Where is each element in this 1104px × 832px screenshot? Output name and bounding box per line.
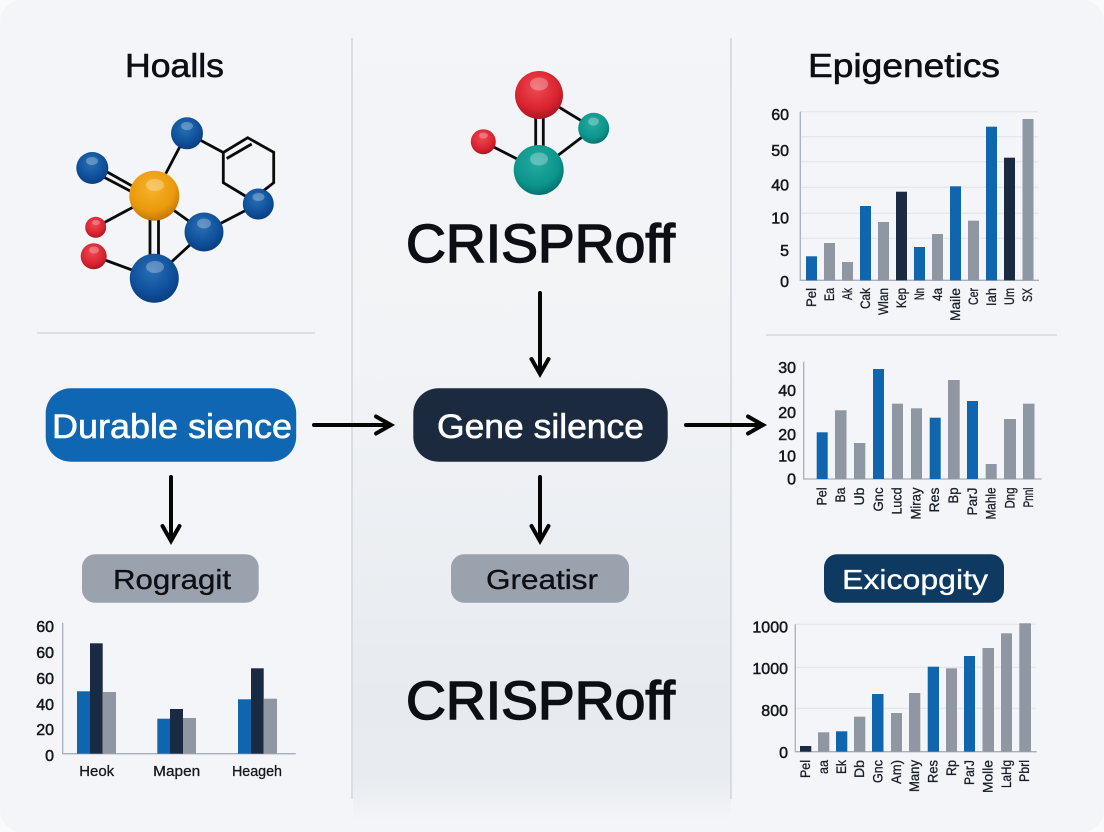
y axis labels: 0 <box>780 274 789 291</box>
x axis labels: Dng <box>1002 488 1018 508</box>
y axis labels: 0 <box>787 472 796 488</box>
arrow: down to Rogragit <box>162 477 180 541</box>
node: Greatisr <box>451 554 629 603</box>
x axis labels: Cer <box>965 288 981 305</box>
chart: bottom bar chart <box>752 620 1037 793</box>
x axis labels <box>797 759 1032 793</box>
node: Exicopgity: Exicopgity <box>842 564 988 595</box>
x axis labels: Ak <box>839 287 855 300</box>
y axis labels: 800 <box>761 703 788 720</box>
x axis labels: Heageh <box>232 763 282 780</box>
x axis labels: Cak <box>857 287 873 309</box>
arrow: left to center <box>314 416 391 434</box>
chart: middle bar chart <box>778 360 1042 520</box>
y axis labels: 40 <box>778 383 796 400</box>
node: Greatisr: Greatisr <box>486 564 598 595</box>
y axis labels: 20 <box>778 427 796 444</box>
heading: CRISPRoff top: CRISPRoff <box>406 214 676 274</box>
icon: molecule with gold center <box>76 117 274 303</box>
x axis labels: Ea <box>821 288 837 301</box>
x axis labels: Ek <box>833 759 849 774</box>
y axis labels: 60 <box>771 107 789 124</box>
y axis labels <box>771 107 789 291</box>
chart: top bar chart <box>771 107 1039 321</box>
y axis labels: 20 <box>36 722 54 739</box>
arrow: down to Gene silence <box>532 293 548 374</box>
arrow: down to Greatisr <box>532 477 548 541</box>
x axis labels: aa <box>815 760 831 774</box>
bars <box>800 623 1031 752</box>
y axis labels <box>752 620 788 762</box>
icon: molecule red and teal <box>471 71 609 195</box>
x axis labels: Um <box>1001 288 1017 305</box>
x axis labels: Res <box>924 760 940 783</box>
y axis labels: 40 <box>36 697 54 714</box>
node: Gene silence <box>413 388 668 462</box>
x axis labels: Lucd <box>888 488 904 514</box>
x axis labels: Db <box>851 760 867 778</box>
y axis labels: 30 <box>778 360 796 377</box>
chart: grouped bars <box>36 619 296 780</box>
x axis labels: Res <box>926 488 942 512</box>
y axis labels: 0 <box>45 748 54 765</box>
x axis labels: Molle <box>980 760 996 793</box>
node: Rogragit: Rogragit <box>113 564 231 595</box>
x axis labels: Mahle <box>982 487 998 520</box>
y axis labels <box>778 360 796 488</box>
x axis labels: Heok <box>79 763 115 780</box>
y axis labels: 60 <box>36 671 54 688</box>
y axis labels: 10 <box>771 210 789 228</box>
x axis labels: Many <box>906 760 922 792</box>
x axis labels: SX <box>1019 288 1035 302</box>
x axis labels: Ba <box>832 487 848 502</box>
x axis labels: ParJ <box>964 488 980 516</box>
y axis labels: 20 <box>778 405 796 422</box>
y axis labels <box>36 619 54 765</box>
x axis labels: Pel <box>797 760 813 778</box>
y axis labels: 1000 <box>752 620 788 636</box>
x axis labels <box>79 763 282 780</box>
x axis labels: Ub <box>851 487 867 506</box>
x axis labels: 4a <box>929 288 945 301</box>
y axis labels: 50 <box>771 143 789 160</box>
bars <box>817 369 1034 479</box>
x axis labels: Bp <box>945 487 961 504</box>
x axis labels: Gnc <box>870 760 886 783</box>
x axis labels <box>814 487 1036 520</box>
x axis labels: Miray <box>908 488 924 520</box>
bars <box>77 643 277 754</box>
node: Rogragit <box>82 554 259 603</box>
y axis labels: 1000 <box>752 661 788 678</box>
y axis labels: 0 <box>779 745 788 762</box>
x axis labels: Pbrl <box>1016 760 1032 782</box>
bars <box>806 119 1034 280</box>
node: Durable sience: Durable sience <box>52 408 292 446</box>
x axis labels: Nn <box>911 288 927 300</box>
x axis labels: Gnc <box>870 488 886 512</box>
panel: center column <box>406 71 676 731</box>
y axis labels: 40 <box>771 178 789 194</box>
y axis labels: 10 <box>778 448 796 466</box>
x axis labels: Pel <box>814 488 830 506</box>
x axis labels: Kep <box>893 288 909 308</box>
x axis labels <box>803 287 1035 321</box>
x axis labels: Am) <box>888 760 904 784</box>
node: Exicopgity <box>824 554 1004 603</box>
center panel background <box>353 0 731 820</box>
x axis labels: Iah <box>983 288 999 306</box>
panel: left column <box>36 47 315 780</box>
x axis labels: Pnnl <box>1020 488 1036 508</box>
y axis labels: 60 <box>36 619 54 636</box>
y axis labels: 60 <box>36 645 54 662</box>
x axis labels: ParJ <box>961 760 977 785</box>
x axis labels: LaHg <box>998 760 1014 788</box>
heading: Hoalls: Hoalls <box>125 47 224 84</box>
x axis labels: Maile <box>947 288 963 321</box>
x axis labels: Rp <box>943 760 959 776</box>
y axis labels: 5 <box>780 243 789 260</box>
x axis labels: Mapen <box>153 763 200 780</box>
heading: CRISPRoff bottom: CRISPRoff <box>406 671 676 731</box>
arrow: center to right <box>686 416 763 434</box>
panel: right column <box>752 47 1057 793</box>
x axis labels: Pel <box>803 288 819 307</box>
node: Durable sience <box>46 388 296 462</box>
x axis labels: Wlan <box>875 288 891 315</box>
heading: Epigenetics: Epigenetics <box>808 47 1000 84</box>
node: Gene silence: Gene silence <box>437 408 644 446</box>
